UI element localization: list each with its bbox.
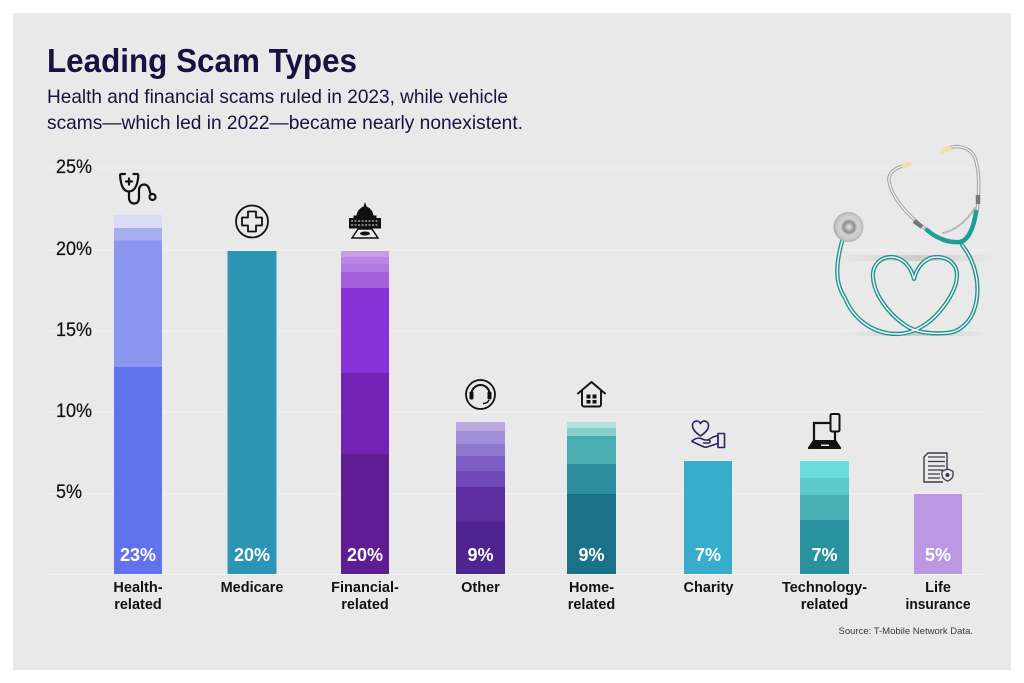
icon: house — [578, 382, 605, 406]
icon: stethoscope small — [120, 174, 156, 204]
bar: life insurance — [914, 494, 962, 574]
shadow: upper floor — [838, 255, 998, 261]
bar: financial-related: 20% — [347, 545, 383, 565]
y axis labels: 10% — [56, 401, 92, 422]
y axis labels: 25% — [56, 157, 92, 178]
bar: medicare — [228, 251, 276, 574]
bar: medicare: 20% — [234, 545, 270, 565]
y axis labels — [56, 157, 92, 503]
category labels: Other — [461, 580, 500, 596]
shadow: lower floor — [845, 331, 990, 336]
bar: home-related — [567, 422, 616, 574]
bar: home-related: 9% — [578, 545, 605, 565]
category labels: Medicare — [221, 580, 283, 596]
chest piece — [834, 212, 864, 242]
bar: charity — [684, 461, 732, 574]
teal headset yoke — [927, 212, 976, 242]
category labels: insurance — [906, 597, 970, 613]
bar: charity: 7% — [695, 545, 721, 565]
ear tubes — [889, 147, 979, 233]
y axis labels: 15% — [56, 320, 92, 341]
icon: laptop and phone — [808, 414, 841, 449]
teal tube — [837, 238, 977, 334]
category labels: Health- — [113, 580, 163, 596]
y axis labels: 20% — [56, 239, 92, 260]
y axis labels: 5% — [56, 482, 82, 503]
title: Leading Scam Types — [47, 42, 357, 79]
icon: capitol building — [349, 202, 381, 238]
category labels: related — [341, 597, 389, 613]
bar: life insurance: 5% — [925, 545, 951, 565]
icon: medical cross in circle — [236, 206, 268, 238]
illustration: stethoscope with heart-shaped tube — [834, 147, 998, 336]
bar: financial-related — [341, 251, 389, 574]
category labels — [113, 580, 970, 613]
icon: heart in hand — [692, 421, 724, 448]
bar: health-related: 23% — [120, 545, 156, 565]
category labels: related — [801, 597, 848, 613]
category labels: Charity — [684, 580, 733, 596]
category labels: Technology- — [782, 580, 867, 596]
subtitle — [47, 86, 523, 134]
icon: headset in circle — [466, 380, 495, 409]
metal connectors — [914, 195, 978, 227]
bar: other — [456, 422, 505, 574]
subtitle: Health and financial scams ruled in 2023, while vehicle — [47, 86, 508, 108]
bar: other: 9% — [467, 545, 494, 565]
category labels: related — [114, 597, 162, 613]
category labels: Life — [925, 580, 951, 596]
category labels: related — [568, 597, 615, 613]
bar: technology-related: 7% — [811, 545, 838, 565]
source note: Source: T-Mobile Network Data. — [839, 626, 973, 637]
bar: health-related — [114, 215, 162, 574]
bar: technology-related — [800, 461, 849, 574]
ear tips — [904, 148, 949, 166]
subtitle: scams—which led in 2022—became nearly nonexistent. — [47, 112, 523, 134]
icon: insurance document — [924, 453, 953, 482]
category labels: Financial- — [331, 580, 399, 596]
category labels: Home- — [569, 580, 614, 596]
